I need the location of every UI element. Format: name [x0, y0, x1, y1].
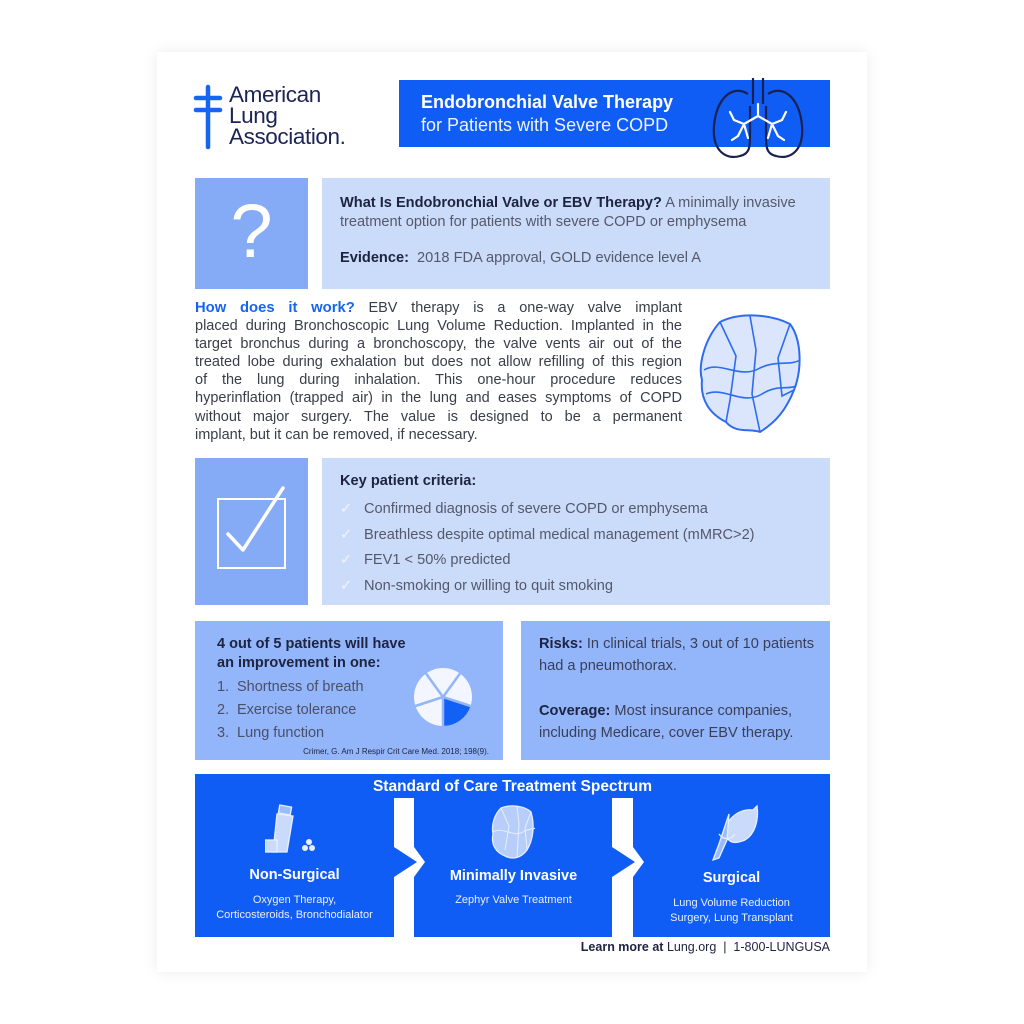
improvement list: 1. [217, 679, 229, 695]
logo text: American [229, 82, 321, 107]
text block: how does it work: treated lobe during exhalation but does not allow refilling of this region [195, 354, 682, 370]
header title: Endobronchial Valve Therapy [421, 92, 673, 112]
label: non-surgical: Corticosteroids, Bronchodialator [216, 908, 373, 920]
icon box: checkbox [195, 458, 308, 605]
header banner [399, 80, 830, 147]
citation: Crimer, G. Am J Respir Crit Care Med. 2018; 198(9). [303, 747, 489, 756]
label: surgical: Surgery, Lung Transplant [670, 912, 793, 924]
icon: lungs [712, 78, 804, 158]
text block: how does it work: How does it work? EBV therapy is a one-way valve implant [195, 300, 682, 316]
label: minimally invasive [450, 868, 577, 906]
improvement list: Lung function [237, 725, 324, 741]
criteria list: Confirmed diagnosis of severe COPD or emphysema [364, 501, 708, 517]
icon box: question [195, 178, 308, 289]
arrows: chevron separators [394, 798, 644, 937]
panel: what is EBV [322, 178, 830, 289]
panel: improvement [195, 621, 503, 760]
logo [194, 82, 346, 150]
criteria list: Breathless despite optimal medical management (mMRC>2) [364, 527, 755, 543]
improvement list: Shortness of breath [237, 679, 364, 695]
criteria heading: Key patient criteria: [340, 473, 476, 489]
icon: hand with scalpel [712, 804, 758, 861]
panel: treatment spectrum [195, 774, 830, 937]
improvement heading: 4 out of 5 patients will have [217, 636, 406, 652]
panel: risks and coverage [521, 621, 830, 760]
improvement list: 3. [217, 725, 229, 741]
label: minimally invasive: Minimally Invasive [450, 868, 577, 884]
logo text: Lung [229, 103, 277, 128]
page card [157, 52, 867, 972]
icon: valve small [492, 805, 536, 859]
pie chart [414, 668, 472, 726]
criteria list: ✓ [340, 552, 352, 568]
criteria list: Non-smoking or willing to quit smoking [364, 578, 613, 594]
header subtitle: for Patients with Severe COPD [421, 115, 668, 135]
icon: lung cross [194, 84, 222, 150]
panel: key patient criteria [322, 458, 830, 605]
label: non-surgical: Non-Surgical [249, 867, 340, 883]
spectrum title: Standard of Care Treatment Spectrum [373, 778, 652, 795]
text block: how does it work: placed during Bronchoscopic Lung Volume Reduction. Implanted in the [195, 318, 682, 334]
criteria list: ✓ [340, 578, 352, 594]
evidence text: Evidence: 2018 FDA approval, GOLD evidence level A [340, 250, 701, 266]
improvement list: 2. [217, 702, 229, 718]
text block: how does it work: implant, but it can be removed, if necessary. [195, 427, 478, 443]
logo text [229, 82, 346, 149]
label: surgical [670, 870, 793, 924]
criteria list: ✓ [340, 527, 352, 543]
criteria list [340, 501, 755, 594]
label: surgical: Lung Volume Reduction [673, 897, 790, 909]
label: minimally invasive: Zephyr Valve Treatment [455, 894, 572, 906]
icon box: question: ? [230, 189, 273, 274]
improvement heading: an improvement in one: [217, 655, 381, 671]
label: non-surgical: Oxygen Therapy, [253, 894, 336, 906]
improvement heading [217, 636, 406, 671]
text block: how does it work [195, 300, 682, 443]
label: non-surgical [216, 867, 373, 920]
risks text: Risks: In clinical trials, 3 out of 10 patients had a pneumothorax. [539, 636, 814, 674]
label: surgical: Surgical [703, 870, 760, 886]
criteria list: FEV1 < 50% predicted [364, 552, 510, 568]
logo text: Association. [229, 124, 346, 149]
text block: how does it work: of the lung during inhalation. This one-hour procedure reduces [195, 372, 682, 388]
footer: learn more: Learn more at Lung.org | 1-800-LUNGUSA [581, 940, 830, 954]
definition text: What Is Endobronchial Valve or EBV Therapy? A minimally invasive treatment option for patients with severe COPD or emphysema [340, 195, 796, 230]
improvement list [217, 679, 364, 741]
text block: how does it work: without major surgery. The value is designed to be a permanent [195, 409, 682, 425]
text block: how does it work: target bronchus during a bronchoscopy, the valve vents air out of the [195, 336, 682, 352]
icon: valve [700, 314, 801, 433]
improvement list: Exercise tolerance [237, 702, 356, 718]
criteria list: ✓ [340, 501, 352, 517]
text block: how does it work: hyperinflation (trapped air) in the lung and eases symptoms of COPD [195, 390, 682, 406]
coverage text: Coverage: Most insurance companies, including Medicare, cover EBV therapy. [539, 703, 793, 741]
icon: inhaler [265, 804, 315, 853]
